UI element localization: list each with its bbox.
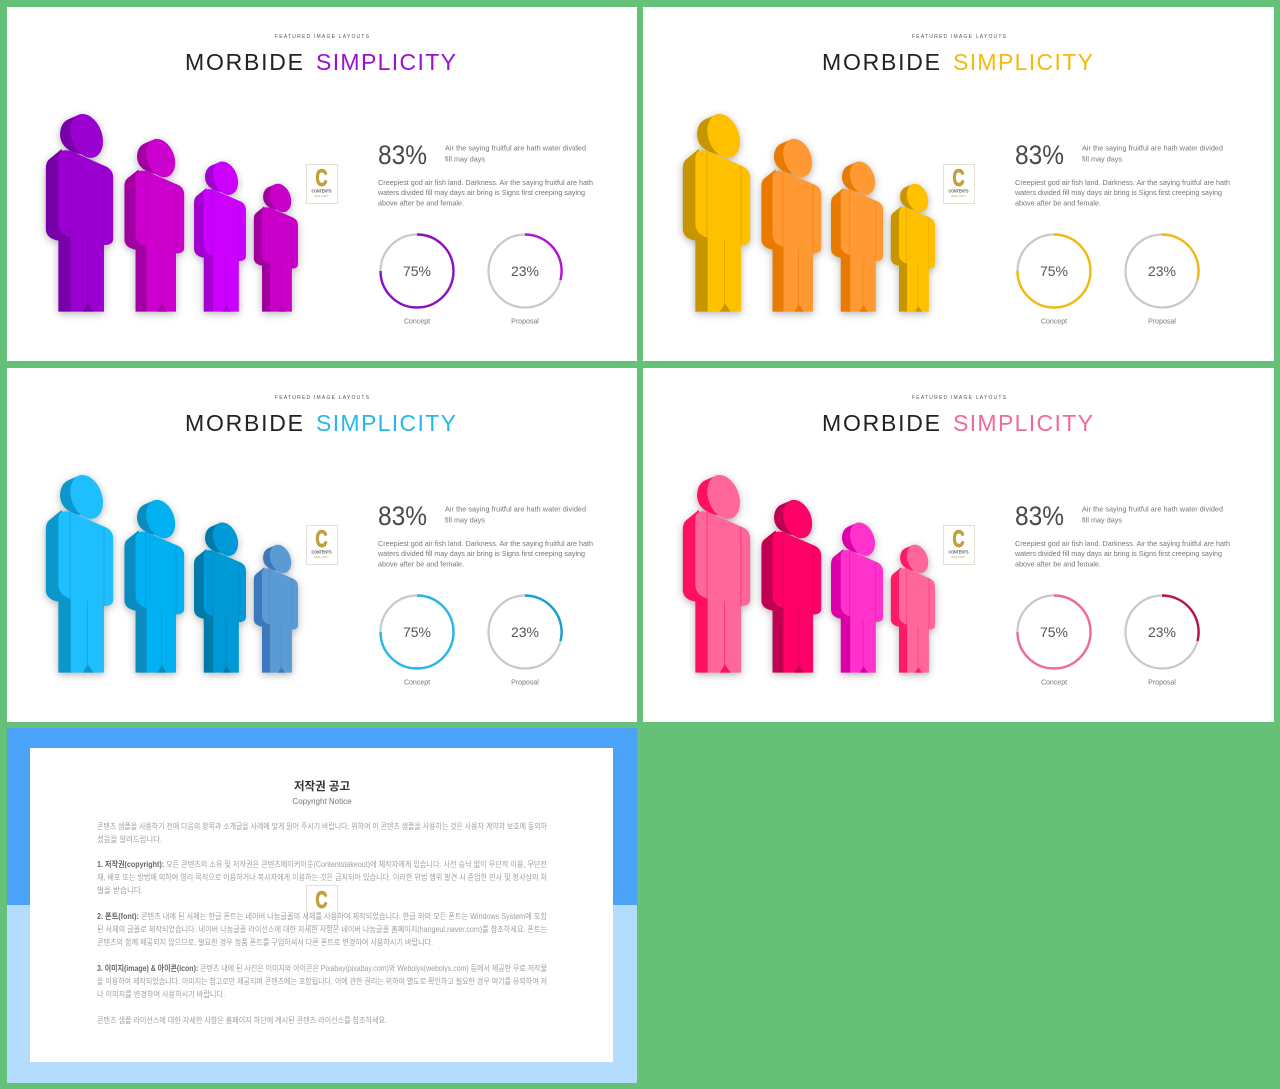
notice logo: C — [316, 887, 328, 914]
title accent: SIMPLICITY — [953, 49, 1093, 75]
panel: blue slide — [7, 368, 637, 722]
figures: four people — [46, 470, 298, 673]
logo: C — [316, 165, 328, 192]
title accent: SIMPLICITY — [316, 49, 456, 75]
notice section 1: 재, 배포 또는 방법에 의하여 영리 목적으로 이용하거나 복사자에게 이용하는 것은 금지되어 있습니다. 이러한 위법 행위 발견 시 준엄한 민사 및 형사상의 처 — [97, 872, 547, 882]
paragraph line 2: waters divided fill may days air bring is Signs first creeping saying — [377, 549, 585, 558]
notice heading: 저작권 공고 — [294, 779, 350, 793]
paragraph line 2: waters divided fill may days air bring is Signs first creeping saying — [1014, 549, 1222, 558]
paragraph: Creepiest god air fish land. Darkness. Air the saying fruitful are hath — [378, 539, 593, 548]
ring: concept: Concept — [404, 318, 430, 326]
notice section 3: 나 이미지를 변경하여 사용하시기 바랍니다. — [97, 989, 225, 999]
notice section 3: 3. 이미지(image) & 아이콘(icon): 콘텐츠 내에 된 사진은 이미지와 아이콘은 Pixabay(pixabay.com)와 Webolys(webolys.com) 등에서 제공한 무료 저작물 — [97, 963, 547, 973]
logo: CONTENTS — [312, 188, 332, 194]
figures: four people — [46, 109, 298, 312]
ring: proposal — [488, 234, 562, 326]
panel: purple slide — [7, 7, 637, 361]
logo: C — [952, 526, 964, 553]
kicker: FEATURED IMAGE LAYOUTS — [912, 395, 1007, 401]
notice section 2: 2. 폰트(font): 콘텐츠 내에 된 서체는 한글 폰트는 네이버 나눔글꼴의 서체를 사용하여 제작되었습니다. 한글 외의 모든 폰트는 Windows System에 포함 — [97, 911, 548, 921]
ring: concept: 75% — [1040, 263, 1068, 279]
ring: concept: 75% — [403, 263, 431, 279]
ring: proposal: 23% — [511, 263, 539, 279]
paragraph line 2: waters divided fill may days air bring is Signs first creeping saying — [1014, 188, 1222, 197]
title: MORBIDE — [822, 49, 940, 75]
notice subheading: Copyright Notice — [292, 797, 352, 806]
stat description line 2: fill may days — [1082, 516, 1122, 524]
ring: proposal: Proposal — [1148, 318, 1176, 326]
stat description: Air the saying fruitful are hath water divided — [445, 144, 586, 152]
kicker: FEATURED IMAGE LAYOUTS — [912, 34, 1007, 40]
title: MORBIDE — [185, 410, 303, 436]
stat: 83% — [378, 501, 427, 531]
logo: CONTENTS — [312, 550, 332, 554]
stat: 83% — [1015, 140, 1064, 170]
stat description: Air the saying fruitful are hath water divided — [1082, 144, 1223, 152]
ring: concept: 75% — [403, 624, 431, 640]
stat: 83% — [1015, 501, 1064, 531]
paragraph: Creepiest god air fish land. Darkness. Air the saying fruitful are hath — [378, 178, 593, 187]
ring: proposal — [1126, 595, 1199, 686]
paragraph line 2: waters divided fill may days air bring is Signs first creeping saying — [377, 188, 585, 197]
logo: REAL COPY — [951, 195, 966, 198]
title accent: SIMPLICITY — [316, 410, 456, 436]
ring: proposal: Proposal — [1148, 680, 1176, 686]
title: MORBIDE — [185, 49, 303, 75]
notice section 1: 벌을 받습니다. — [97, 885, 143, 895]
paragraph: Creepiest god air fish land. Darkness. Air the saying fruitful are hath — [1015, 539, 1230, 548]
paragraph line 3: above after be and female. — [378, 560, 464, 568]
logo: REAL COPY — [314, 195, 329, 198]
paragraph line 3: above after be and female. — [1015, 198, 1101, 208]
ring: proposal: Proposal — [511, 318, 539, 326]
ring: concept — [380, 596, 454, 686]
ring: concept: Concept — [404, 680, 430, 686]
ring: proposal: Proposal — [511, 680, 539, 686]
logo: C — [952, 165, 964, 192]
panel: copyright notice — [7, 728, 637, 1083]
notice section 1 — [97, 859, 547, 895]
stat description: Air the saying fruitful are hath water divided — [445, 504, 586, 514]
stat description line 2: fill may days — [445, 516, 485, 524]
notice intro: 셨음을 알려드립니다. — [97, 834, 162, 844]
logo: CONTENTS — [948, 188, 968, 194]
title accent: SIMPLICITY — [953, 410, 1093, 436]
logo: REAL COPY — [951, 556, 966, 559]
logo: CONTENTS — [948, 550, 968, 554]
stat description: Air the saying fruitful are hath water divided — [1082, 504, 1223, 514]
ring: proposal: 23% — [511, 624, 539, 640]
notice logo — [306, 886, 338, 926]
stat description line 2: fill may days — [445, 154, 485, 164]
notice section 3 — [97, 963, 547, 999]
stat description line 2: fill may days — [1082, 154, 1122, 164]
ring: concept — [1018, 234, 1090, 326]
ring: concept: Concept — [1041, 680, 1067, 686]
ring: proposal: 23% — [1148, 624, 1176, 640]
notice section 2: 콘텐츠의 함께 제공되지 않으므로, 필요한 경우 정품 폰트를 구입하셔서 다른 폰트로 변경하여 사용하시기 바랍니다. — [97, 937, 433, 947]
notice section 3: 을 이용하여 제작되었습니다. 이미지는 참고로만 제공되며 콘텐츠에는 포함됩니다. 이에 관한 권리는 위하여 별도로 확인하고 필요한 경우 여기를 유의하여 저 — [97, 976, 547, 986]
notice intro: 콘텐츠 샘플을 사용하기 전에 다음의 항목과 소개글을 사례에 맞게 읽어 주시기 바랍니다. 위하여 이 콘텐츠 샘플을 사용하는 것은 사용자 계약과 보호에 동의하 — [97, 821, 548, 831]
ring: concept: Concept — [1041, 318, 1067, 326]
ring: proposal — [488, 595, 562, 686]
figures: four people — [683, 470, 935, 673]
notice section 2 — [97, 911, 548, 947]
panel: gold slide — [643, 7, 1274, 361]
figures: four people — [683, 109, 935, 312]
paragraph line 3: above after be and female. — [1015, 560, 1101, 568]
panel: pink slide — [643, 368, 1274, 722]
ring: concept — [1018, 596, 1090, 686]
notice section 2: 된 서체의 글꼴로 제작되었습니다. 네이버 나눔글꼴 라이선스에 대한 자세한 사항은 네이버 나눔글꼴 홈페이지(hangeul.naver.com)를 참조하세요. 폰트는 — [97, 924, 547, 934]
notice footer line: 콘텐츠 샘플 라이선스에 대한 자세한 사항은 홈페이지 하단에 게시된 콘텐츠 라이선스를 참조하세요. — [97, 1015, 387, 1025]
ring: concept — [380, 234, 454, 326]
title: MORBIDE — [822, 410, 940, 436]
logo: REAL COPY — [314, 556, 329, 559]
paragraph: Creepiest god air fish land. Darkness. Air the saying fruitful are hath — [1015, 178, 1230, 187]
notice intro — [97, 821, 548, 844]
logo — [306, 526, 338, 564]
notice section 1: 1. 저작권(copyright): 모든 콘텐츠의 소유 및 저작권은 콘텐츠메이커이웃(Contentstakeout)에 제작자에게 있습니다. 사전 승낙 없이 무단적 이용, 무단전 — [97, 859, 547, 869]
kicker: FEATURED IMAGE LAYOUTS — [275, 34, 370, 40]
kicker: FEATURED IMAGE LAYOUTS — [275, 395, 370, 401]
paragraph line 3: above after be and female. — [378, 198, 464, 208]
logo — [306, 164, 338, 204]
logo — [944, 526, 974, 564]
stat: 83% — [378, 140, 427, 170]
ring: proposal: 23% — [1148, 263, 1176, 279]
logo — [944, 164, 974, 204]
ring: proposal — [1126, 234, 1199, 326]
logo: C — [316, 526, 328, 553]
ring: concept: 75% — [1040, 624, 1068, 640]
